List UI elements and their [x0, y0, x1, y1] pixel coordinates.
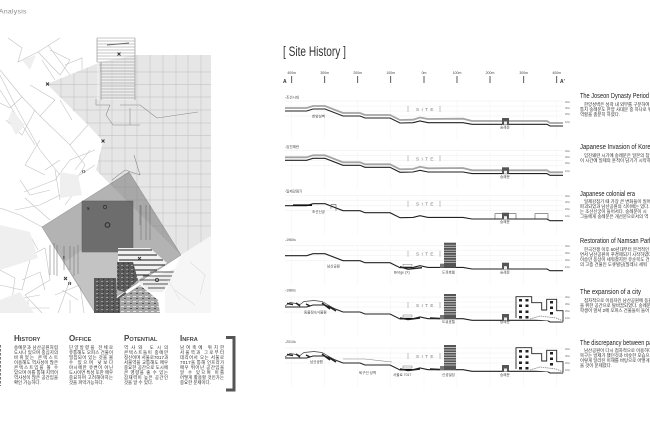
- elevation labels: 10m: [565, 120, 570, 124]
- distance scale: 300m: [320, 71, 329, 75]
- elevation labels: 30m: [565, 155, 570, 159]
- distance scale: A: [283, 79, 287, 85]
- elevation labels: 20m: [565, 161, 570, 165]
- text column: cut-off left: [0, 345, 1, 386]
- elevation labels: 40m: [565, 100, 570, 104]
- text column: potential: 큰 영향을 줄 수 있는: [124, 369, 168, 376]
- lower right terrain: [165, 236, 211, 313]
- elevation labels: 30m: [565, 251, 570, 255]
- text block: discrepancy: 을 것이 문제였다.: [580, 362, 612, 369]
- section 6: 2010s: [285, 340, 563, 387]
- elevation labels: 30m: [565, 200, 570, 204]
- text column: office: [69, 334, 113, 386]
- light grey zone with grid: [47, 55, 211, 255]
- section 6: 2010s: 신성빌딩: [442, 372, 455, 377]
- vertical stripes: [50, 205, 150, 276]
- elevation labels: 30m: [565, 106, 570, 110]
- elevation labels: 20m: [565, 309, 570, 313]
- section 5: 1980s: -1980s: [285, 288, 296, 292]
- section 4: 1960s: [285, 238, 563, 285]
- distance scale: 400m: [552, 71, 561, 75]
- text block: invasion: [580, 142, 650, 164]
- text column: office: 중요하며 고려해야하는: [69, 374, 113, 381]
- section 5: 1980s: 도큐호텔: [442, 319, 455, 324]
- map letters: H: [68, 281, 72, 286]
- text block: colonial: [580, 189, 650, 220]
- elevation labels: 30m: [565, 302, 570, 306]
- text block: discrepancy: [580, 338, 650, 369]
- hatched rectangle: [97, 38, 135, 100]
- text column: history: 이용해도 역사성이 많은: [14, 359, 58, 366]
- section 6: 2010s: 서울로 7017: [393, 372, 411, 377]
- section 5: 1980s: 동물정숙식물원: [304, 310, 327, 314]
- text block: restoration: [580, 236, 650, 268]
- elevation labels: 40m: [565, 244, 570, 248]
- section 6: 2010s: -2010s: [285, 340, 296, 344]
- text column: history: [14, 334, 58, 386]
- striped zone: [118, 248, 167, 280]
- elevation labels: 10m: [565, 265, 570, 269]
- elevation labels: 10m: [565, 316, 570, 320]
- distance scale: 100m: [453, 71, 461, 75]
- text column: office: 밀집되어 있는 것을 볼: [69, 354, 113, 361]
- text column: potential: 콘텍스트들이 중에만: [124, 349, 168, 356]
- text column: office: 도시이면 특성 또한 매우: [69, 369, 113, 376]
- text column: infra: [180, 334, 224, 386]
- text block: restoration: 의 고층 건물인 도큐빌딩(밀레니 세워: [580, 261, 647, 268]
- distance scale: 100m: [386, 71, 395, 75]
- text block: expansion: 을 위한 공간으로 탈바꿈되었다. 숭례문: [580, 302, 650, 309]
- text column: history: HISTORY: [14, 334, 41, 343]
- section 4: 1960s: -1960s: [285, 238, 296, 242]
- text column: infra: 어떻게 활용할 것인가는: [180, 374, 224, 381]
- distance scale: 400m: [287, 71, 296, 75]
- text column: history: 있으며 이를 통해 지역이: [14, 369, 58, 376]
- elevation labels: 10m: [565, 169, 570, 173]
- text column: history: 콘텍스트임을 볼 수: [14, 364, 58, 371]
- section 4: 1960s: 도큐호텔: [442, 270, 455, 275]
- text column: infra: 서울역과 그로부터: [180, 349, 224, 356]
- text column: history: 송예문과 남산공원처럼: [14, 344, 58, 351]
- section 2: Japanese invasion: -임진왜란: [285, 144, 300, 149]
- text column: office: 것을 파악가능하다.: [69, 379, 104, 386]
- section 5: 1980s: 숭례문: [500, 319, 510, 324]
- elevation labels: 10m: [565, 214, 570, 218]
- elevation labels: 30m: [565, 354, 570, 358]
- elevation labels: 10m: [565, 368, 570, 372]
- section 2: Japanese invasion: [285, 144, 563, 189]
- text block: expansion: 학생이 앞서 2에 오피스 건물들이 들어: [580, 307, 649, 314]
- text block: restoration: 이승만 동상이 세워졌지만 유순목도 건: [580, 256, 650, 263]
- distance scale: 200m: [353, 71, 362, 75]
- elevation labels: 20m: [565, 112, 570, 116]
- city blocks: [94, 278, 127, 313]
- lower-left urban texture: [0, 55, 82, 313]
- elevation labels: 40m: [565, 149, 570, 153]
- section 4: 1960s: 남산공원: [327, 264, 340, 269]
- section 3: colonial era: 숭례문: [500, 219, 510, 224]
- elevation labels: 20m: [565, 258, 570, 262]
- text block: Joseon: [580, 91, 650, 118]
- text column: office: OFFICE: [69, 334, 92, 343]
- striped zone 2: [138, 268, 177, 292]
- text column: infra: 7017을 통해 인프라가: [180, 359, 224, 366]
- section 1: Joseon: 숭례문: [500, 124, 510, 130]
- bracket: [226, 338, 234, 390]
- text column: potential: 중요한 공간으로 도시에: [124, 364, 168, 371]
- map letters: I: [63, 255, 65, 260]
- text block: colonial: 는 조선신궁이 들어서다. 숭례문이 시: [580, 208, 647, 215]
- elevation labels: [565, 100, 570, 372]
- text block: expansion: [580, 287, 650, 314]
- text column: office: 단양방향을 전체로: [69, 344, 113, 351]
- text column: potential: 정신이며 서울로7017과: [124, 354, 168, 361]
- text column: infra: 중요한 문제이다.: [180, 379, 211, 386]
- section 3: colonial era: -일제강점기: [285, 189, 302, 194]
- text column: history: 역사성이 많은 공간임을: [14, 374, 58, 381]
- title: site history: [ Site History ]: [283, 44, 346, 59]
- text block: discrepancy: 이렇게 달라진 이해를 바탕으로 어떻게: [580, 357, 650, 364]
- section 1: Joseon: 한양성벽: [312, 114, 325, 118]
- text column: potential: POTENTIAL: [124, 334, 158, 343]
- map letters: S: [87, 206, 90, 211]
- map letters: O: [82, 169, 86, 174]
- section 1: Joseon: [285, 94, 563, 140]
- text column: infra: 데리어서 오는 서울로: [180, 354, 224, 361]
- text column: infra: 알 수 있으며 이를: [180, 369, 224, 376]
- text column: potential: 것을 알 수 있다.: [124, 379, 153, 386]
- map markers: [46, 52, 159, 282]
- elevation labels: 20m: [565, 361, 570, 365]
- section 6: 2010s: 남산공원: [310, 359, 323, 364]
- section 4: 1960s: 숭례문: [500, 270, 510, 275]
- section 5: 1980s: [285, 288, 563, 336]
- text column: infra: 남여축에 위치한: [180, 344, 224, 351]
- map letters: [63, 169, 90, 286]
- text block: colonial: 파괴되었과 남산공원의 식이에는 있다.: [580, 203, 650, 210]
- section 3: colonial era: [285, 189, 563, 235]
- text column: potential: 역사와 도시의: [124, 344, 168, 351]
- road network: [0, 38, 95, 313]
- section 6: 2010s: 퇴구인 성벽: [359, 370, 376, 375]
- distance scale: 0m: [422, 71, 427, 75]
- distance scale: 300m: [519, 71, 528, 75]
- section 1: Joseon: -조선시대: [285, 94, 299, 100]
- text column: infra: 매우 뛰어난 공간임을: [180, 364, 224, 371]
- text column: potential: [124, 334, 168, 386]
- section 3: colonial era: 조선신궁: [312, 209, 326, 214]
- text column: potential: 잠재력이 높은 공간인: [124, 374, 168, 381]
- section 6: 2010s: 숭례문: [500, 372, 510, 377]
- text column: history: 확인 가능하다.: [14, 379, 41, 386]
- text column: office: 수 있으며 낮보다: [69, 359, 113, 366]
- text column: infra: INFRA: [180, 334, 198, 343]
- section 2: Japanese invasion: 숭례문: [500, 174, 510, 179]
- text column: potential: 서울역을 교통해도 매우: [124, 359, 168, 366]
- text column: office: 야시에만 유변이 아닌: [69, 364, 113, 371]
- text column: history: 바뀌었는 콘텍스트: [14, 354, 58, 361]
- text block: colonial: 그들에게 숭례문은 개선문으로서의 역: [580, 213, 648, 220]
- elevation labels: 40m: [565, 194, 570, 198]
- dark square: [82, 201, 133, 252]
- elevation labels: 40m: [565, 347, 570, 351]
- text column: history: 도시나 있으며 중심지의: [14, 349, 58, 356]
- text column: office: 유통해도 오피스 건물이: [69, 349, 113, 356]
- text block: Joseon: 역할을 충분히 하였다.: [580, 111, 620, 118]
- distance scale: [283, 71, 565, 85]
- elevation labels: 40m: [565, 295, 570, 299]
- elevation labels: 20m: [565, 207, 570, 211]
- distance scale: 200m: [486, 71, 494, 75]
- distance scale: A': [560, 79, 565, 85]
- panel: site analysis map: [0, 38, 211, 313]
- section 4: 1960s: Bridge (X): [394, 271, 410, 275]
- rotated overlay square: [42, 172, 181, 311]
